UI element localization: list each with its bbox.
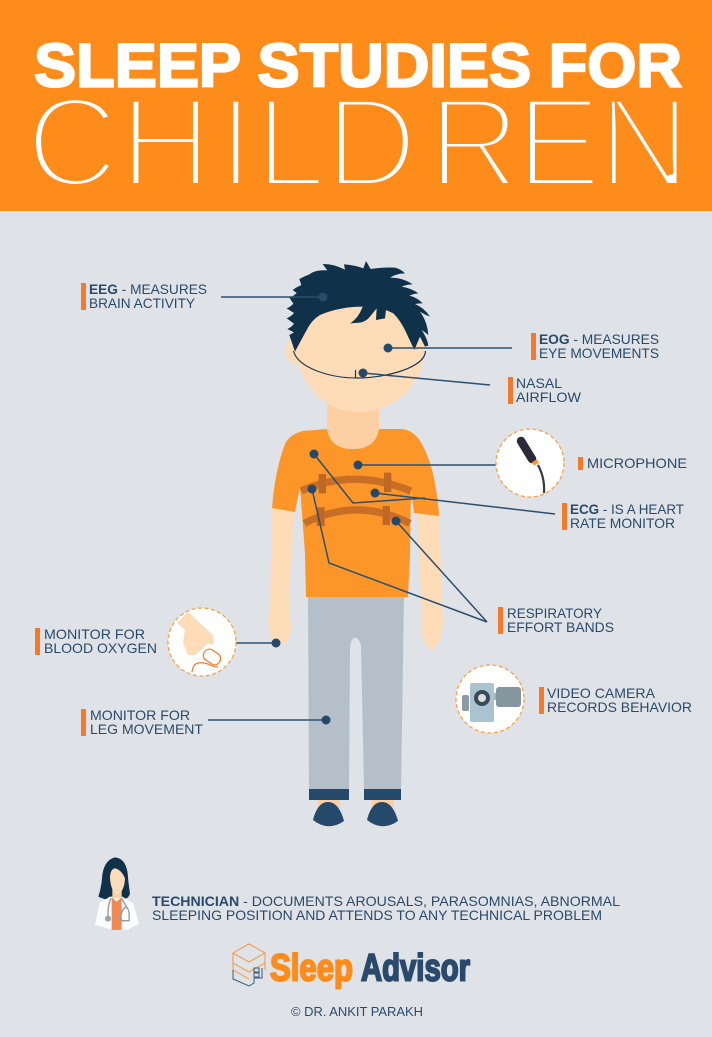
label: respiratory effort bands: RESPIRATORY	[507, 605, 603, 621]
icon: microphone	[496, 429, 564, 497]
respiratory bands	[301, 473, 411, 526]
label: video camera: RECORDS BEHAVIOR	[547, 699, 692, 715]
technician description: SLEEPING POSITION AND ATTENDS TO ANY TECHNICAL PROBLEM	[152, 907, 602, 923]
logo: Sleep Advisor	[233, 944, 470, 990]
pointer lines	[208, 297, 555, 720]
label: respiratory effort bands: EFFORT BANDS	[507, 619, 614, 635]
header banner	[0, 0, 712, 214]
nasal cannula	[294, 351, 426, 378]
cuffs	[309, 789, 401, 800]
hair	[287, 261, 430, 352]
pointer dots	[272, 292, 400, 724]
label: nasal airflow: AIRFLOW	[516, 389, 582, 405]
label: blood oxygen: MONITOR FOR	[44, 626, 145, 642]
child figure	[268, 261, 443, 826]
label: blood oxygen	[35, 626, 157, 656]
shoes	[313, 802, 398, 826]
label: video camera	[539, 685, 692, 715]
label: ECG: RATE MONITOR	[570, 515, 675, 531]
logo: Sleep Advisor: Advisor	[361, 948, 470, 990]
label: leg movement: LEG MOVEMENT	[90, 721, 203, 737]
arms	[268, 505, 443, 650]
copyright: © DR. ANKIT PARAKH	[291, 1005, 423, 1019]
icon: finger oximeter	[168, 608, 236, 676]
logo wordmark: Sleep	[270, 948, 353, 990]
ankles	[318, 800, 394, 808]
face	[295, 285, 425, 412]
label: EEG	[81, 281, 207, 311]
icon: technician	[95, 857, 139, 930]
label: EEG: EEG - MEASURES	[89, 281, 207, 297]
label: leg movement: MONITOR FOR	[90, 707, 190, 723]
label: video camera: VIDEO CAMERA	[547, 685, 656, 701]
pants	[308, 597, 404, 789]
title line 2: CHILDREN	[26, 72, 690, 214]
technician description: TECHNICIAN - DOCUMENTS AROUSALS, PARASOMNIAS, ABNORMAL	[152, 893, 620, 909]
ear	[286, 336, 304, 364]
label: EOG: EYE MOVEMENTS	[539, 345, 659, 361]
label: respiratory effort bands	[498, 605, 614, 635]
label: nasal airflow: NASAL	[516, 375, 562, 391]
label: EOG	[531, 331, 659, 361]
label: ECG: ECG - IS A HEART	[570, 501, 684, 517]
title line 1: SLEEP STUDIES FOR	[34, 32, 682, 100]
label: EOG: EOG - MEASURES	[539, 331, 659, 347]
shirt	[272, 429, 439, 597]
label: EEG: BRAIN ACTIVITY	[89, 295, 196, 311]
icon: video camera	[456, 665, 524, 733]
technician description	[152, 893, 620, 923]
label: microphone: MICROPHONE	[587, 455, 687, 471]
logo icon	[233, 944, 265, 986]
label: blood oxygen: BLOOD OXYGEN	[44, 640, 157, 656]
neck	[327, 395, 379, 449]
label: ECG	[562, 501, 684, 531]
label: nasal airflow	[508, 375, 582, 405]
label: leg movement	[81, 707, 203, 737]
